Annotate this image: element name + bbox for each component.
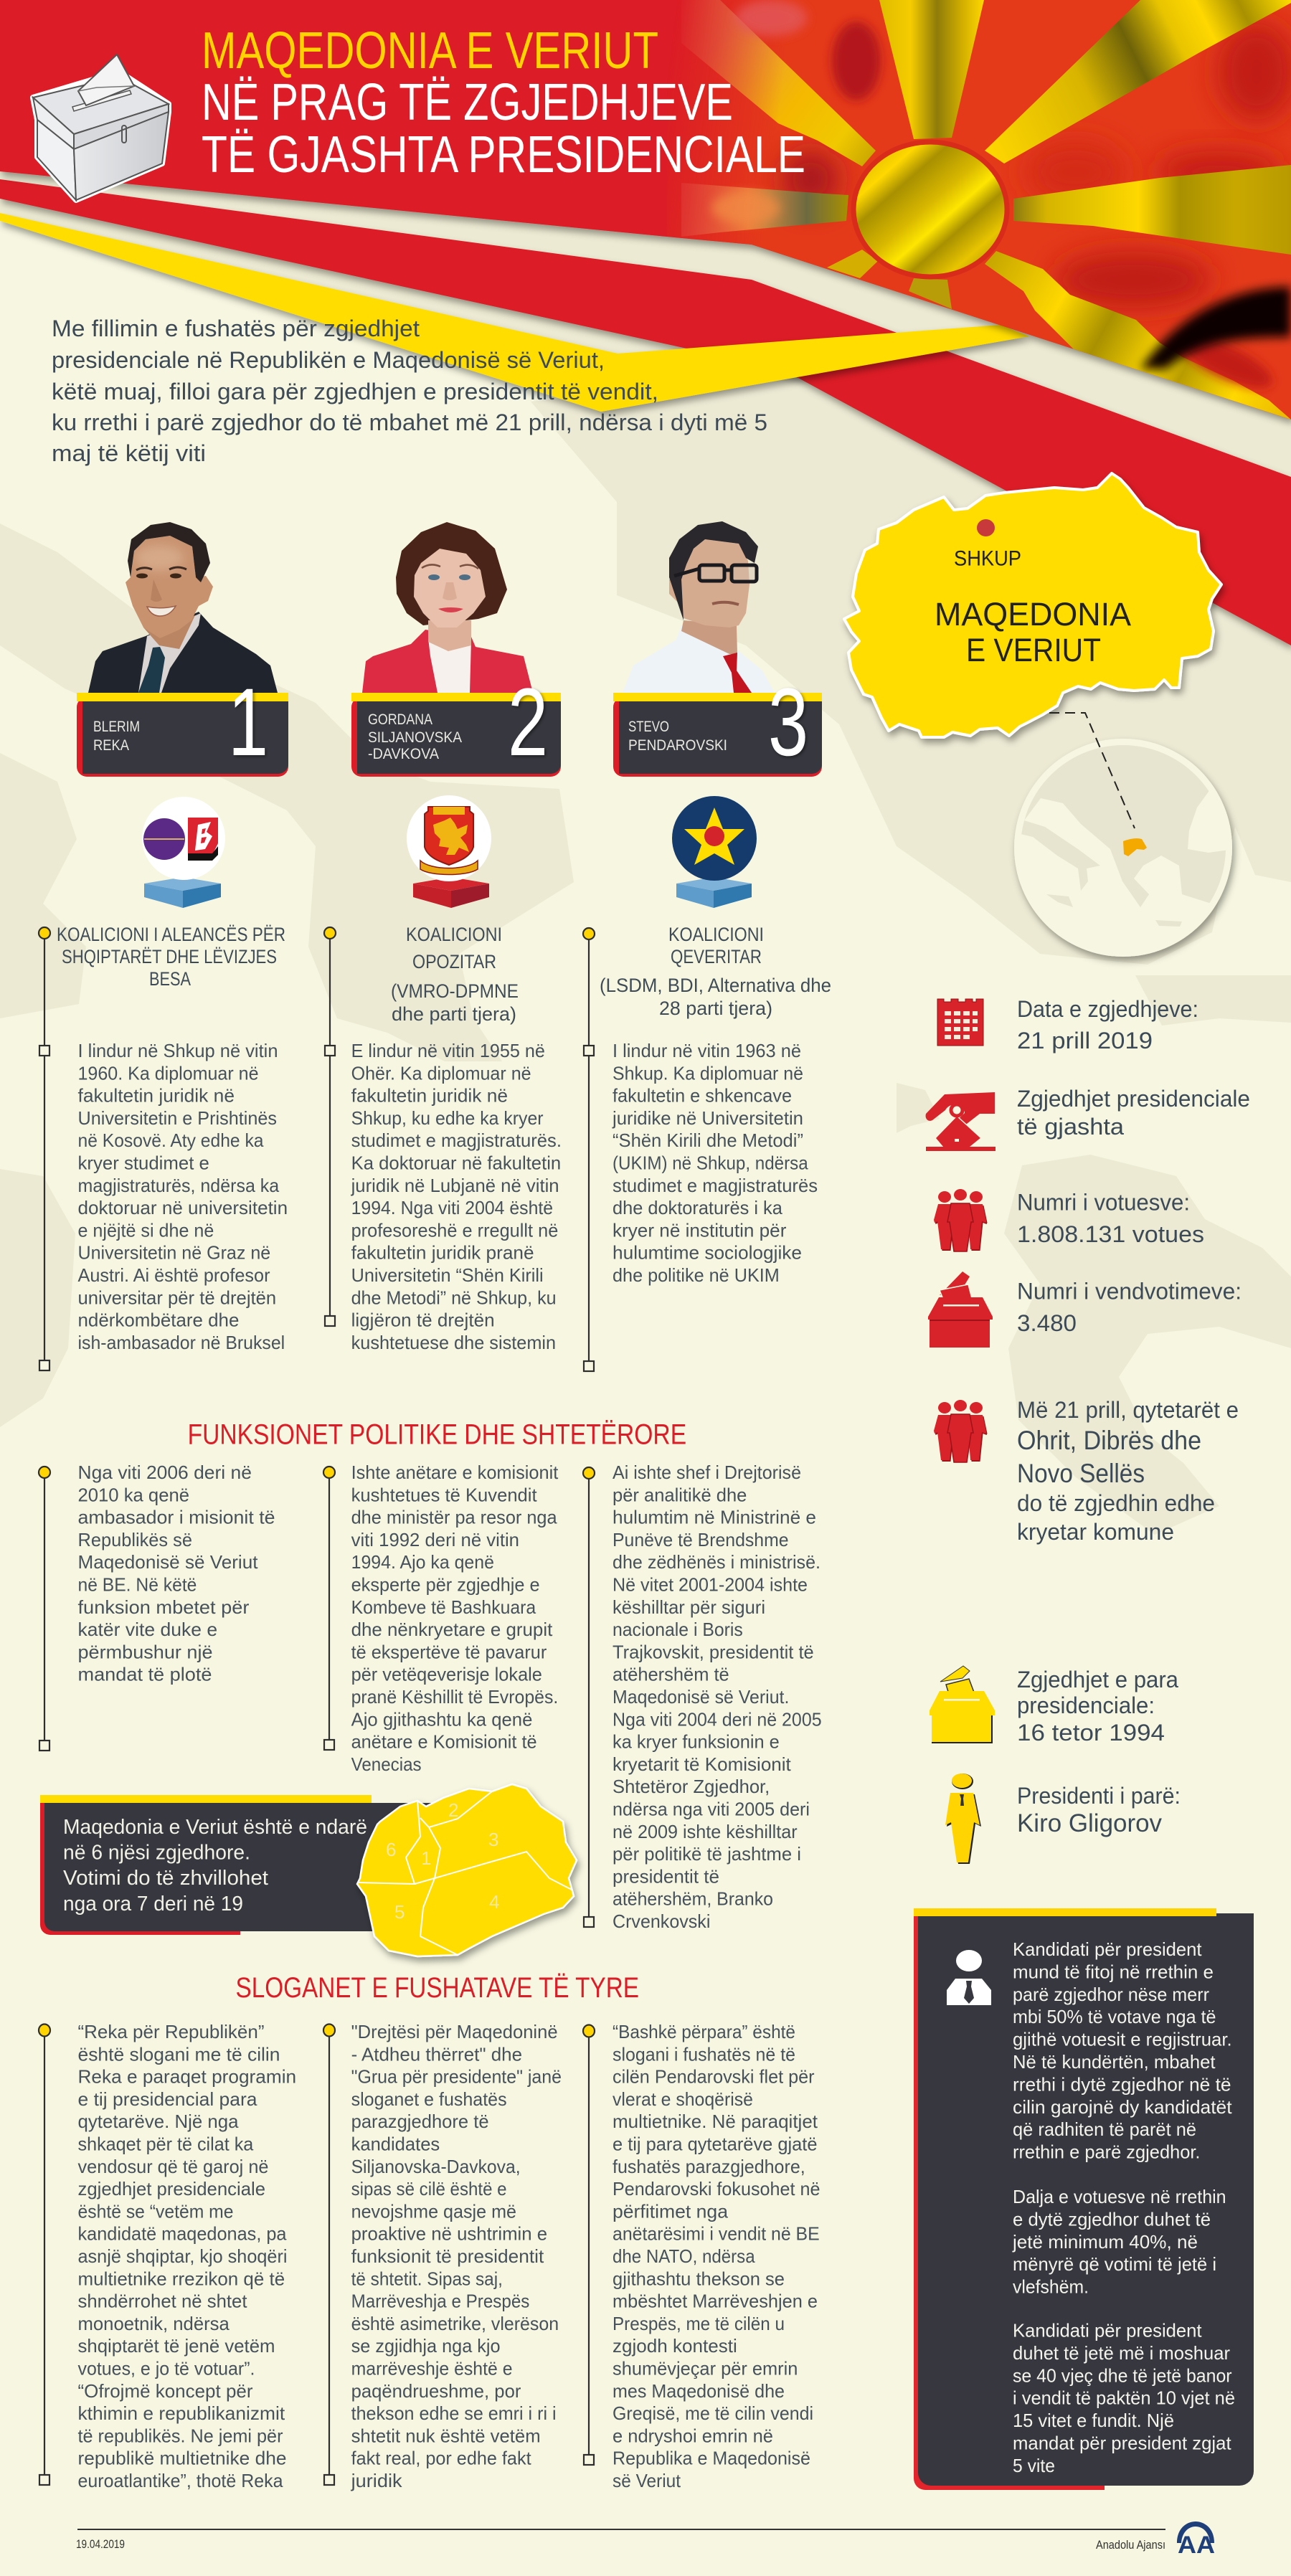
slogan: Pendarovski: së Veriut (613, 2470, 681, 2491)
slogan: Siljanovska-Davkova: shtetit nuk është vetëm (351, 2425, 541, 2446)
functions: Reka: funksion mbetet për (77, 1596, 250, 1618)
functions: Pendarovski: kryetarit të Komisionit (613, 1753, 792, 1775)
callout: electoral units: Maqedonia e Veriut është e ndarë (63, 1816, 367, 1839)
stat: previous presidential election (1017, 1667, 1178, 1746)
rules text: rrethi i dytë zgjedhor në të (1013, 2073, 1231, 2095)
biography: Siljanovska-Davkova: juridik në Lubjanë në vitin (351, 1175, 559, 1196)
coalition heading 1: BESA (149, 968, 191, 990)
footer rule (77, 2529, 1165, 2530)
stat: previous presidential election: 16 tetor 1994 (1017, 1720, 1165, 1746)
icon: red ballot box (928, 1272, 993, 1348)
stat: election date (1017, 996, 1198, 1053)
map: six electoral units (357, 1784, 577, 1956)
functions: Siljanovska-Davkova: Kombeve të Bashkuara (351, 1596, 536, 1618)
coalition heading 2: KOALICIONI (406, 924, 502, 945)
biography: Pendarovski: Shkup. Ka diplomuar në (613, 1062, 803, 1084)
map: six electoral units: 1 (421, 1847, 431, 1869)
slogan: Siljanovska-Davkova: fakt real, por edhe fakt (351, 2448, 531, 2469)
functions: Pendarovski: Ai ishte shef i Drejtorisë (613, 1462, 801, 1483)
panel: election rules (914, 1908, 1254, 2490)
slogan: Reka: multietnike rrezikon që të (77, 2268, 285, 2289)
functions: Pendarovski: për politikë të jashtme i (613, 1843, 801, 1865)
functions: Pendarovski (613, 1462, 822, 1932)
stat: number of voters (1017, 1189, 1204, 1247)
slogan: Siljanovska-Davkova: thekson edhe se emri i ri i (351, 2402, 557, 2424)
biography: Siljanovska-Davkova: studimet e magjistraturës. (351, 1130, 562, 1151)
rules text: mbi 50% të votave nga të (1013, 2006, 1216, 2027)
slogan: Pendarovski: dhe NATO, ndërsa (613, 2245, 755, 2267)
functions: Pendarovski: Punëve të Brendshme (613, 1529, 789, 1550)
timeline markers: biographies (39, 927, 595, 1371)
coalition heading 2: (VMRO-DPMNE (391, 980, 519, 1002)
callout: electoral units: në 6 njësi zgjedhore. (63, 1842, 250, 1865)
slogan: Pendarovski: slogani i fushatës në të (613, 2043, 795, 2065)
candidate card 2: 2 (508, 669, 548, 776)
timeline markers: slogans (39, 2024, 595, 2485)
stat: local mayoral votes: Ohrit, Dibrës dhe (1017, 1426, 1201, 1455)
slogan: Siljanovska-Davkova: është asimetrike, vlerëson (351, 2313, 559, 2334)
flag fade glow (711, 0, 807, 224)
functions: Reka: në BE. Në këtë (77, 1573, 197, 1595)
biography: Reka: ndërkombëtare dhe (77, 1310, 239, 1331)
rules text: 5 vite (1013, 2455, 1055, 2476)
coalition heading 2: dhe parti tjera) (392, 1003, 516, 1025)
coalition heading 3: 28 parti tjera) (659, 998, 772, 1019)
slogan: Siljanovska-Davkova: "Drejtësi për Maqedoninë (351, 2021, 558, 2042)
slogan: Pendarovski: anëtarësimi i vendit në BE (613, 2223, 820, 2245)
biography: Reka (77, 1040, 288, 1353)
intro text: ku rrethi i parë zgjedhor do të mbahet më 21 prill, ndërsa i dyti më 5 (52, 409, 767, 435)
map: North Macedonia: MAQEDONIA (935, 596, 1131, 633)
icon: calendar (937, 999, 983, 1046)
biography: Siljanovska-Davkova: dhe Metodi” në Shkup, ku (351, 1287, 557, 1308)
functions: Pendarovski: për analitikë dhe (613, 1484, 747, 1505)
rules text: që radhiten të parët në (1013, 2118, 1196, 2140)
slogan: Pendarovski: gjithashtu thekson se (613, 2268, 785, 2289)
locator globe (1011, 739, 1234, 957)
intro text: këtë muaj, filloi gara për zgjedhjen e presidentit të vendit, (52, 379, 658, 404)
slogan: Siljanovska-Davkova: funksionit të presidentit (351, 2245, 544, 2267)
candidate card 3: 3 (768, 669, 808, 776)
party logo 1 (142, 797, 225, 908)
coalition heading 3: KOALICIONI (668, 924, 764, 945)
stat: number of voters: 1.808.131 votues (1017, 1221, 1204, 1247)
biography: Pendarovski (612, 1040, 818, 1286)
biography: Reka: kryer studimet e (77, 1152, 209, 1173)
functions: Pendarovski: Në vitet 2001-2004 ishte (613, 1573, 808, 1595)
biography: Pendarovski: hulumtime sociologjike (613, 1242, 802, 1264)
stat: local mayoral votes: Më 21 prill, qytetarët e (1017, 1397, 1239, 1423)
callout: electoral units: Votimi do të zhvillohet (63, 1867, 268, 1890)
candidate card 1: 1 (228, 669, 268, 776)
slogan: Siljanovska-Davkova: Siljanovska-Davkova, (351, 2156, 521, 2177)
stat: previous presidential election: presidenciale: (1017, 1692, 1155, 1718)
functions: Pendarovski: Maqedonisë së Veriut. (613, 1686, 789, 1708)
stat: local mayoral votes: do të zgjedhin edhe (1017, 1490, 1215, 1516)
slogan: Pendarovski: Pendarovski fokusohet në (613, 2178, 821, 2199)
map: six electoral units: 2 (448, 1799, 458, 1821)
biography: Pendarovski: I lindur në vitin 1963 në (613, 1040, 801, 1061)
slogan: Siljanovska-Davkova: nevojshme qasje më (351, 2200, 516, 2222)
slogan: Pendarovski: zgjodh kontesti (613, 2335, 737, 2357)
candidate card 2: GORDANA (368, 711, 432, 728)
footer date: 19.04.2019 (76, 2537, 125, 2551)
title: TË GJASHTA PRESIDENCIALE (202, 126, 805, 184)
slogan: Reka (77, 2021, 296, 2491)
slogan: Siljanovska-Davkova: "Grua për presidente" janë (351, 2066, 562, 2088)
slogan: Siljanovska-Davkova: se zgjidhja nga kjo (351, 2335, 501, 2357)
slogan: Pendarovski: cilën Pendarovski flet për (613, 2066, 815, 2088)
functions: Siljanovska-Davkova: Ishte anëtare e komisionit (351, 1462, 559, 1483)
rules text: i vendit të paktën 10 vjet në (1013, 2387, 1235, 2409)
slogan: Siljanovska-Davkova (351, 2021, 562, 2491)
functions: Siljanovska-Davkova: kushtetues të Kuvendit (351, 1484, 537, 1505)
functions: Reka: Maqedonisë së Veriut (77, 1551, 258, 1573)
biography: Siljanovska-Davkova: Ohër. Ka diplomuar në (351, 1062, 531, 1084)
functions: Reka: mandat të plotë (77, 1664, 212, 1685)
slogan: Pendarovski: përfitimet nga (613, 2200, 729, 2222)
functions: Pendarovski: Shtetëror Zgjedhor, (613, 1776, 770, 1797)
biography: Pendarovski: dhe politike në UKIM (613, 1264, 780, 1286)
biography: Pendarovski: fakultetin e shkencave (613, 1085, 792, 1107)
rules text: Në të kundërtën, mbahet (1013, 2051, 1216, 2073)
rules text (1012, 1938, 1235, 2476)
slogan: Siljanovska-Davkova: Marrëveshja e Prespës (351, 2291, 529, 2312)
slogan: Reka: kthimin e republikanizmit (77, 2402, 285, 2424)
slogan: Pendarovski: Republika e Maqedonisë (613, 2448, 810, 2469)
coalition heading 1 (57, 924, 285, 990)
header red panel (0, 0, 1291, 420)
stat: local mayoral votes (1017, 1397, 1239, 1545)
slogan: Pendarovski: e ndryshoi emrin në (613, 2425, 773, 2446)
stat: sixth presidential election (1017, 1086, 1250, 1140)
slogan: Reka: e tij presidencial para (77, 2088, 257, 2110)
functions: Siljanovska-Davkova: për vetëqeverisje lokale (351, 1664, 542, 1685)
slogan: Reka: “Ofrojmë koncept për (77, 2380, 253, 2402)
biography: Siljanovska-Davkova: Universitetin “Shën Kirili (351, 1264, 544, 1286)
stat: first president: Presidenti i parë: (1017, 1783, 1181, 1809)
icon: candidate (947, 1950, 991, 2005)
functions: Pendarovski: presidentit të (613, 1865, 719, 1887)
slogan: Reka: të republikës. Ne jemi për (77, 2425, 283, 2446)
functions: Pendarovski: Trajkovskit, presidentit të (613, 1641, 814, 1662)
coalition heading 3 (600, 924, 831, 1019)
slogan: Reka: asnjë shqiptar, kjo shoqëri (77, 2245, 287, 2267)
biography: Siljanovska-Davkova: Shkup, ku edhe ka kryer (351, 1107, 544, 1129)
biography: Pendarovski: “Shën Kirili dhe Metodi” (613, 1130, 803, 1151)
icon: voters (934, 1189, 987, 1251)
rules text: Kandidati për president (1013, 1938, 1202, 1960)
rules text: Kandidati për president (1013, 2319, 1202, 2341)
coalition heading 3: (LSDM, BDI, Alternativa dhe (600, 975, 831, 996)
logo: Anadolu Agency (1177, 2521, 1215, 2559)
icon: hand with ballot (926, 1092, 996, 1151)
functions: Siljanovska-Davkova: dhe nënkryetare e grupit (351, 1619, 553, 1640)
rules text: jetë minimum 40%, në (1012, 2231, 1198, 2253)
slogan: Reka: është slogani me të cilin (77, 2043, 280, 2065)
stat: sixth presidential election: Zgjedhjet presidenciale (1017, 1086, 1250, 1112)
slogan: Reka: republikë multietnike dhe (77, 2448, 287, 2469)
slogan: Pendarovski: shumëvjeçar për emrin (613, 2358, 798, 2380)
map: North Macedonia: SHKUP (954, 546, 1021, 571)
slogan: Siljanovska-Davkova: proaktive në ushtrimin e (351, 2223, 547, 2245)
stat: first president: Kiro Gligorov (1017, 1809, 1162, 1837)
footer credit: Anadolu Ajansı (1096, 2538, 1165, 2552)
rules text: rrethin e parë zgjedhor. (1013, 2141, 1201, 2163)
functions: Pendarovski: ka kryer funksionin e (613, 1731, 780, 1753)
slogan: Pendarovski: e tij para qytetarëve gjatë (613, 2133, 818, 2154)
icon: ballot box (33, 55, 169, 200)
biography: Pendarovski: studimet e magjistraturës (613, 1175, 818, 1196)
slogan: Pendarovski: mbështet Marrëveshjen e (613, 2291, 818, 2312)
slogan: Reka: vendosur që të garoj në (77, 2156, 268, 2177)
candidate card 2: -DAVKOVA (368, 746, 439, 762)
timeline markers: functions (39, 1467, 595, 1927)
slogan: Reka: qytetarëve. Një nga (77, 2111, 239, 2132)
stat: local mayoral votes: Novo Sellës (1017, 1459, 1145, 1488)
party logo 3 (672, 796, 757, 908)
functions: Siljanovska-Davkova: Ajo gjithashtu ka qenë (351, 1708, 532, 1730)
functions: Siljanovska-Davkova: Venecias (351, 1753, 422, 1775)
slogan: Pendarovski: vlerat e shoqërisë (613, 2088, 753, 2110)
biography: Reka: Universitetin në Graz në (77, 1242, 270, 1264)
biography: Siljanovska-Davkova: fakultetin juridik pranë (351, 1242, 534, 1264)
stat: election date: 21 prill 2019 (1017, 1028, 1153, 1053)
callout: electoral units (40, 1795, 435, 1935)
intro text: maj të këtij viti (52, 440, 206, 466)
rules text: e dytë zgjedhor duhet të (1013, 2208, 1211, 2230)
biography: Siljanovska-Davkova: fakultetin juridik në (351, 1085, 508, 1107)
slogan: Reka: shqiptarët të jenë vetëm (77, 2335, 275, 2357)
decorative ribbons (0, 164, 1291, 653)
intro text (52, 316, 767, 466)
biography: Siljanovska-Davkova: Ka doktoruar në fakultetin (351, 1152, 561, 1173)
slogan: Reka: shndërrohet në shtet (77, 2291, 247, 2312)
stat: polling stations: Numri i vendvotimeve: (1017, 1278, 1242, 1304)
biography: Siljanovska-Davkova (351, 1040, 562, 1353)
slogan: Pendarovski: fushatës parazgjedhore, (613, 2156, 805, 2177)
rules text: mënyrë që votimi të jetë i (1013, 2253, 1216, 2275)
functions: Pendarovski: këshilltar për siguri (613, 1596, 765, 1618)
icon: citizens (934, 1400, 987, 1462)
functions: Reka (77, 1462, 275, 1685)
functions: Siljanovska-Davkova: 1994. Ajo ka qenë (351, 1551, 494, 1573)
slogan: Siljanovska-Davkova: kandidates (351, 2133, 440, 2154)
biography: Pendarovski: kryer në institutin për (613, 1219, 787, 1241)
biography: Reka: doktoruar në universitetin (77, 1197, 288, 1218)
slogan: Siljanovska-Davkova: parazgjedhore të (351, 2111, 489, 2132)
coalition heading 2 (391, 924, 519, 1025)
slogan: Reka: shkaqet për të cilat ka (77, 2133, 254, 2154)
functions: Siljanovska-Davkova: eksperte për zgjedhje e (351, 1573, 540, 1595)
biography: Reka: në Kosovë. Aty edhe ka (77, 1130, 264, 1151)
slogan: Siljanovska-Davkova: juridik (351, 2470, 403, 2491)
stat: number of voters: Numri i votuesve: (1017, 1189, 1190, 1215)
dashed connector (1049, 713, 1135, 828)
map: six electoral units: 3 (488, 1829, 498, 1850)
rules text: mandat për president zgjat (1013, 2433, 1231, 2454)
slogan: Reka: zgjedhjet presidenciale (77, 2178, 265, 2199)
functions: Pendarovski: Crvenkovski (613, 1910, 710, 1932)
candidate 2 portrait (362, 522, 533, 693)
functions: Pendarovski: ndërsa nga viti 2005 deri (613, 1799, 810, 1820)
section heading: political functions: FUNKSIONET POLITIKE DHE SHTETËRORE (188, 1419, 686, 1450)
candidate card 3: STEVO (628, 719, 669, 735)
rules text: mund të fitoj në rrethin e (1013, 1961, 1214, 1982)
rules text: vlefshëm. (1013, 2276, 1089, 2298)
slogan: Reka: euroatlantike”, thotë Reka (77, 2470, 283, 2491)
functions: Pendarovski: në 2009 ishte këshilltar (613, 1821, 798, 1842)
map: six electoral units: 6 (386, 1839, 396, 1860)
map: North Macedonia (844, 473, 1221, 737)
candidate card 3: PENDAROVSKI (628, 737, 727, 754)
title (202, 22, 805, 184)
functions: Reka: përmbushur një (77, 1641, 212, 1662)
biography: Siljanovska-Davkova: ligjëron të drejtën (351, 1310, 495, 1331)
stat: polling stations: 3.480 (1017, 1310, 1077, 1336)
slogan: Pendarovski: multietnike. Në paraqitjet (613, 2111, 818, 2132)
stat: sixth presidential election: të gjashta (1017, 1114, 1124, 1140)
slogan: Pendarovski (613, 2021, 821, 2491)
rules text: duhet të jetë më i moshuar (1013, 2342, 1230, 2364)
slogan: Siljanovska-Davkova: - Atdheu thërret" dhe (351, 2043, 522, 2065)
rules text: 15 vitet e fundit. Një (1013, 2410, 1174, 2431)
functions: Pendarovski: nacionale i Boris (613, 1619, 743, 1640)
slogan: Siljanovska-Davkova: sloganet e fushatës (351, 2088, 507, 2110)
biography: Reka: 1960. Ka diplomuar në (77, 1062, 258, 1084)
slogan: Pendarovski: Prespës, me të cilën u (613, 2313, 785, 2334)
candidate card 3 (613, 669, 822, 777)
functions: Reka: Nga viti 2006 deri në (77, 1462, 252, 1483)
party logo 2 (407, 795, 491, 908)
slogan: Siljanovska-Davkova: paqëndrueshme, por (351, 2380, 521, 2402)
functions: Siljanovska-Davkova: viti 1992 deri në vitin (351, 1529, 519, 1550)
rules text: parë zgjedhor nëse merr (1013, 1984, 1209, 2005)
functions: Reka: ambasador i misionit të (77, 1507, 275, 1528)
stat: election date: Data e zgjedhjeve: (1017, 996, 1198, 1022)
coalition heading 2: OPOZITAR (412, 951, 496, 972)
slogan: Reka: monoetnik, ndërsa (77, 2313, 230, 2334)
candidate card 1: REKA (93, 737, 129, 754)
stat: polling stations (1017, 1278, 1242, 1336)
stat: local mayoral votes: kryetar komune (1017, 1519, 1174, 1545)
functions: Pendarovski: atëhershëm, Branko (613, 1888, 773, 1910)
stat: first president (1017, 1783, 1181, 1837)
biography: Reka: fakultetin juridik në (77, 1085, 235, 1107)
slogan: Siljanovska-Davkova: marrëveshje është e (351, 2358, 512, 2380)
intro text: Me fillimin e fushatës për zgjedhjet (52, 316, 420, 341)
candidate card 2 (351, 669, 561, 777)
rules text: cilin garojnë dy kandidatët (1013, 2096, 1232, 2118)
slogan: Pendarovski: mes Maqedonisë dhe (613, 2380, 785, 2402)
slogan: Pendarovski: Greqisë, me të cilin vendi (613, 2402, 813, 2424)
functions: Pendarovski: dhe zëdhënës i ministrisë. (613, 1551, 821, 1573)
biography: Reka: I lindur në Shkup në vitin (77, 1040, 278, 1061)
slogan: Pendarovski: “Bashkë përpara” është (613, 2021, 795, 2042)
biography: Reka: Austri. Ai është profesor (77, 1264, 270, 1286)
stat: previous presidential election: Zgjedhjet e para (1017, 1667, 1178, 1692)
coalition heading 1: SHQIPTARËT DHE LËVIZJES (62, 946, 277, 967)
biography: Reka: Universitetin e Prishtinës (77, 1107, 277, 1129)
slogan: Reka: “Reka për Republikën” (77, 2021, 264, 2042)
candidate 3 portrait (623, 521, 775, 693)
map: North Macedonia: E VERIUT (966, 632, 1101, 668)
biography: Pendarovski: juridike në Universitetin (612, 1107, 803, 1129)
title: MAQEDONIA E VERIUT (202, 22, 658, 80)
biography: Reka: e njëjtë si dhe në (77, 1219, 214, 1241)
coalition heading 3: QEVERITAR (671, 946, 762, 967)
slogan: Siljanovska-Davkova: të shtetit. Sipas saj, (351, 2268, 503, 2289)
title: NË PRAG TË ZGJEDHJEVE (202, 74, 733, 131)
functions: Siljanovska-Davkova (351, 1462, 559, 1775)
logo: Anadolu Agency: AA (1178, 2532, 1215, 2559)
functions: Pendarovski: atëhershëm të (613, 1664, 729, 1685)
functions: Reka: katër vite duke e (77, 1619, 217, 1640)
icon: first president (945, 1774, 981, 1864)
intro text: presidenciale në Republikën e Maqedonisë së Veriut, (52, 347, 605, 373)
functions: Pendarovski: Nga viti 2004 deri në 2005 (613, 1708, 822, 1730)
biography: Reka: magjistraturës, ndërsa ka (77, 1175, 280, 1196)
functions: Reka: 2010 ka qenë (77, 1484, 189, 1505)
functions: Siljanovska-Davkova: pranë Këshillit të Evropës. (351, 1686, 558, 1708)
biography: Siljanovska-Davkova: profesoreshë e rregullt në (351, 1219, 558, 1241)
functions: Reka: Republikës së (77, 1529, 192, 1550)
biography: Reka: ish-ambasador në Bruksel (77, 1332, 285, 1353)
biography: Siljanovska-Davkova: 1994. Nga viti 2004 është (351, 1197, 553, 1218)
rules text: Dalja e votuesve në rrethin (1013, 2186, 1226, 2207)
slogan: Siljanovska-Davkova: sipas së cilë është e (351, 2178, 507, 2199)
candidate card 1 (77, 669, 288, 777)
map: six electoral units: 5 (394, 1901, 405, 1923)
icon: yellow ballot box (930, 1666, 995, 1743)
slogan: Reka: është se “vetëm me (77, 2200, 234, 2222)
biography: Pendarovski: dhe doktoraturës i ka (613, 1197, 782, 1218)
slogan: Reka: kandidatë maqedonas, pa (77, 2223, 287, 2245)
functions: Siljanovska-Davkova: të ekspertëve të pavarur (351, 1641, 547, 1662)
biography: Siljanovska-Davkova: kushtetuese dhe sistemin (351, 1332, 556, 1353)
coalition heading 1: KOALICIONI I ALEANCËS PËR (57, 924, 285, 945)
functions: Siljanovska-Davkova: dhe ministër pa resor nga (351, 1507, 557, 1528)
candidate card 2: SILJANOVSKA (368, 729, 462, 746)
rules text: se 40 vjeç dhe të jetë banor (1013, 2364, 1232, 2386)
candidate card 1: BLERIM (93, 719, 140, 735)
biography: Pendarovski: (UKIM) në Shkup, ndërsa (613, 1152, 808, 1173)
map: six electoral units: 4 (489, 1891, 499, 1913)
callout: electoral units: nga ora 7 deri në 19 (63, 1893, 243, 1916)
section heading: campaign slogans: SLOGANET E FUSHATAVE TË TYRE (235, 1972, 639, 2004)
functions: Pendarovski: hulumtim në Ministrinë e (613, 1507, 816, 1528)
biography: Siljanovska-Davkova: E lindur në vitin 1955 në (351, 1040, 545, 1061)
slogan: Reka: votues, e jo të votuar”. (77, 2358, 255, 2380)
candidate 1 portrait (88, 522, 278, 693)
rules text: gjithë votuesit e regjistruar. (1013, 2029, 1232, 2050)
functions: Siljanovska-Davkova: anëtare e Komisionit të (351, 1731, 537, 1753)
biography: Reka: universitar për të drejtën (77, 1287, 276, 1308)
flag of North Macedonia (679, 0, 1291, 420)
slogan: Reka: Reka e paraqet programin (77, 2066, 296, 2088)
